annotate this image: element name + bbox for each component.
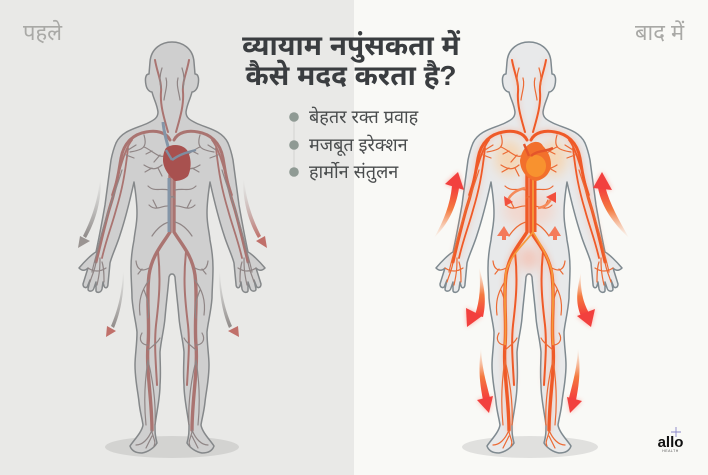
figure: before exercise: [79, 42, 265, 453]
arrow: lower right: [219, 272, 239, 337]
arrow: upper left: [434, 172, 464, 238]
arrow: middle left: [466, 267, 485, 327]
arrow glow: heads: [445, 172, 612, 413]
arrow: lower left: [477, 348, 493, 413]
title: व्यायाम नपुंसकता में: [241, 29, 461, 63]
bright vessels: [445, 60, 613, 448]
arrow: middle right: [577, 272, 595, 327]
heart: [163, 145, 196, 181]
logo: [658, 427, 683, 453]
vessel glow: [453, 60, 605, 430]
arrow: upper right: [593, 172, 629, 238]
ground shadow: before figure: [105, 436, 239, 458]
bullet: blood flow: बेहतर रक्त प्रवाह: [309, 106, 419, 127]
bullet: hormones: हार्मोन संतुलन: [309, 161, 399, 184]
arrows: before figure: [78, 180, 267, 337]
aorta highlight: [530, 175, 536, 232]
arrow: upper right: [243, 180, 267, 248]
vein: [163, 122, 169, 232]
logo: allo: [658, 434, 683, 451]
label: after: बाद में: [635, 20, 685, 45]
torso glow: [495, 140, 567, 270]
arrow: inner lower right: [548, 226, 561, 240]
aorta core: [505, 175, 553, 345]
body silhouette: [436, 42, 622, 453]
arrow: lower left: [106, 272, 124, 337]
dull vessels: [88, 60, 256, 448]
ground shadow: after figure: [462, 436, 598, 458]
background: right panel: [354, 0, 708, 475]
arrow: upper left: [78, 180, 101, 248]
arrow: inner upper left: [504, 188, 525, 206]
figure: after exercise: [436, 42, 622, 453]
arrow: lower right: [567, 348, 582, 413]
background: left panel: [0, 0, 354, 475]
logo: HEALTH: [662, 449, 679, 453]
benefit list: [289, 106, 419, 184]
arrow: inner lower left: [497, 226, 510, 240]
title: कैसे मदद करता है?: [245, 58, 457, 91]
arrow: inner upper right: [538, 192, 556, 208]
label: before: पहले: [23, 19, 63, 45]
arrows: after figure: [434, 172, 629, 413]
heart: [520, 142, 553, 181]
body silhouette: [79, 42, 265, 453]
bullet: erection: मजबूत इरेक्शन: [309, 134, 409, 157]
